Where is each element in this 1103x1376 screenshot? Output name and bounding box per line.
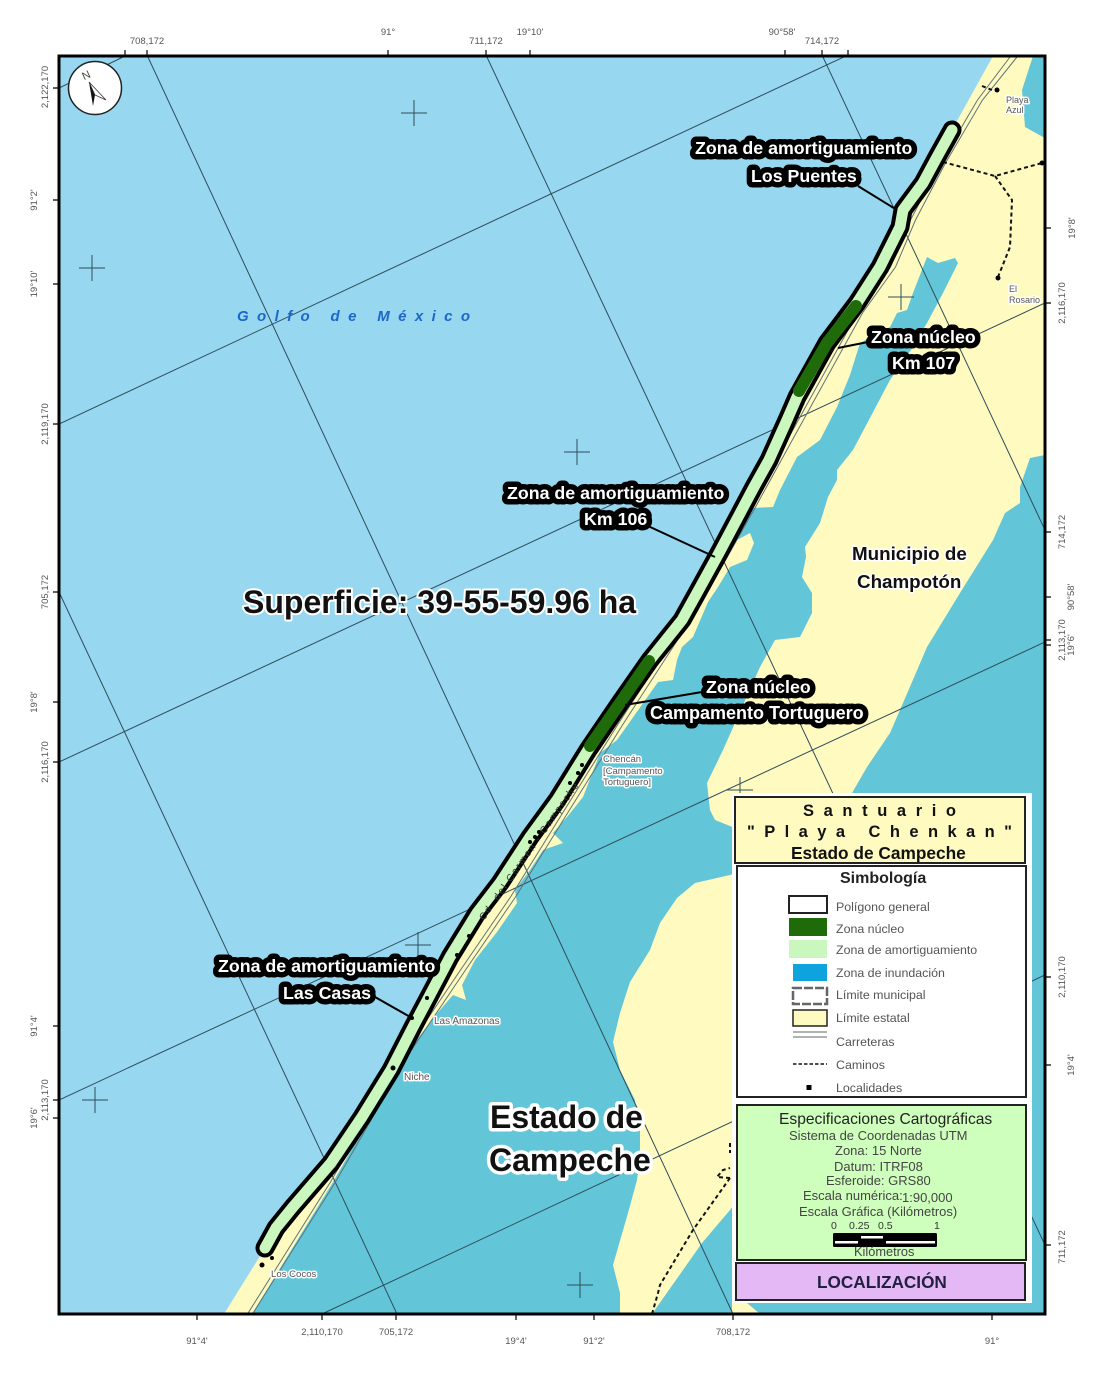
road name along the strip: Cd. del Carmen - Campeche [477,781,581,923]
legend item labels [836,900,977,1095]
locality names: Azul [1006,105,1024,115]
panel: cartographic specifications [737,1105,1026,1260]
locality names: Las Amazonas [434,1016,500,1027]
callout: Las Casas: Las Casas [283,983,371,1003]
panel: cartographic specifications: Escala numérica: [803,1188,903,1203]
callout: Km 106: Km 106 [584,509,647,529]
right coordinate labels: 2,113,170 [1057,619,1068,661]
top coordinate labels: 714,172 [805,36,839,47]
bottom coordinate labels: 19°4' [505,1336,527,1347]
top coordinate labels: 90°58' [769,27,796,38]
leader lines [375,186,897,1018]
scale bar [831,1220,940,1259]
scale bar: 0.5 [878,1220,893,1232]
roads [248,57,1017,1314]
left coordinate labels: 2,122,170 [40,66,51,108]
bottom coordinate labels: 2,110,170 [301,1327,343,1338]
panel: cartographic specifications: Sistema de Coordenadas UTM [789,1128,967,1143]
callout: Campamento Tortuguero: Zona núcleo [706,677,811,697]
panel: location [736,1263,1025,1300]
locality dots [260,88,1044,1268]
scale bar: Kilómetros [854,1244,914,1259]
panel: symbology: Simbología [840,870,926,887]
panel: cartographic specifications: Esferoide: GRS80 [826,1173,931,1188]
panel: cartographic specifications: Escala Gráfica (Kilómetros) [799,1204,957,1219]
left coordinate labels: 705,172 [40,575,51,609]
core zone: Campamento Tortuguero [590,661,649,746]
locality names [271,95,1040,1280]
locality names: Tortuguero] [603,777,651,788]
swatch: general polygon [789,896,827,913]
swatch: roads [793,1032,827,1037]
left coordinate labels: 2,113,170 [40,1079,51,1121]
callout: Km 107 [871,327,976,373]
legend item labels: Límite municipal [836,988,926,1002]
right coordinate labels: 90°58' [1066,583,1077,610]
surface area heading: Superficie: 39-55-59.96 ha [243,584,636,620]
icon: north arrow: N [80,69,93,83]
sanctuary outline: general polygon [265,130,952,1248]
bottom coordinate labels: 91°2' [583,1336,605,1347]
land base [224,56,1045,1314]
locality names: Los Cocos [271,1269,317,1280]
scale bar: 0 [831,1220,837,1232]
swatch: municipal limit [793,988,827,1004]
callout: Los Puentes: Los Puentes [751,166,857,186]
bottom coordinate labels: 91°4' [186,1336,208,1347]
locality names: Chencán [603,754,641,765]
left coordinate labels [29,66,51,1129]
right coordinate labels: 711,172 [1057,1230,1068,1264]
scale bar: 0.25 [849,1220,870,1232]
bottom coordinate labels: 91° [985,1336,999,1347]
callout: Campamento Tortuguero [650,677,864,723]
label: Municipio de Champotón [852,543,967,592]
core zone: Km 107 [799,306,856,391]
legend item labels: Zona núcleo [836,922,904,936]
right coordinate labels [1057,217,1078,1264]
swatch: state limit [793,1010,827,1026]
callout: Las Casas: Zona de amortiguamiento [218,956,435,976]
bottom coordinate labels: 705,172 [379,1327,413,1338]
panel: cartographic specifications: Datum: ITRF08 [834,1159,923,1174]
bottom coordinate labels: 708,172 [716,1327,750,1338]
right coordinate labels: 2,110,170 [1057,956,1068,998]
panel: cartographic specifications: Especificaciones Cartográficas [779,1111,992,1128]
grid crosshairs [79,100,914,1298]
scale bar: 1 [934,1220,940,1232]
label: Municipio de Champotón: Champotón [857,571,961,592]
callout: Las Casas [218,956,435,1003]
panel: title: Estado de Campeche [791,843,966,863]
top coordinate labels [130,27,839,47]
lagoon: main flood zone [252,257,958,1314]
left coordinate labels: 91°2' [29,189,40,211]
panel: cartographic specifications: 1:90,000 [902,1190,953,1205]
callout: Km 106 [507,483,724,529]
panel: title: Santuario [803,802,956,820]
swatch: core zone [789,918,827,936]
right coordinate labels: 2,116,170 [1057,282,1068,324]
panel: cartographic specifications: Zona: 15 Norte [835,1143,922,1158]
locality names: Niche [404,1072,430,1083]
legend item labels: Zona de amortiguamiento [836,943,977,957]
locality names: El [1009,284,1017,294]
legend item labels: Polígono general [836,900,930,914]
right coordinate labels: 714,172 [1057,515,1068,549]
lagoon: eastern flood zone [652,455,1045,1314]
callout: Campamento Tortuguero: Campamento Tortuguero [650,703,864,723]
label: Municipio de Champotón: Municipio de [852,543,967,564]
left coordinate labels: 19°6' [29,1107,40,1129]
top coordinate labels: 91° [381,27,395,38]
label: Estado de Campeche: Campeche [489,1142,651,1178]
locality names: [Campamento [603,766,663,777]
legend item labels: Zona de inundación [836,966,945,980]
left coordinate labels: 91°4' [29,1015,40,1037]
locality names: Playa [1006,95,1029,105]
callout: Los Puentes: Zona de amortiguamiento [695,138,912,158]
legend panel [732,793,1032,1303]
icon: north arrow [68,62,122,114]
callout: Km 107: Km 107 [892,353,955,373]
panel: title: "Playa Chenkan" [747,823,1012,841]
legend item labels: Caminos [836,1058,885,1072]
label: Golfo de México: Golfo de México [237,308,470,325]
left coordinate labels: 19°10' [29,270,40,297]
left coordinate labels: 2,119,170 [40,403,51,445]
buffer zone strip [265,130,952,1248]
swatch: buffer zone [789,940,827,958]
top coordinate labels: 19°10' [517,27,544,38]
swatch: tracks [793,1063,827,1065]
right coordinate labels: 19°6' [1066,634,1077,656]
right coordinate labels: 19°4' [1066,1054,1077,1076]
panel: title [735,797,1025,863]
legend item labels: Límite estatal [836,1011,910,1025]
right coordinate labels: 19°8' [1067,217,1078,239]
top coordinate labels: 708,172 [130,36,164,47]
label: Estado de Campeche: Estado de [490,1099,643,1135]
locality names: Rosario [1009,295,1040,305]
left coordinate labels: 19°8' [29,691,40,713]
legend item labels: Carreteras [836,1035,895,1049]
callout: Km 107: Zona núcleo [871,327,976,347]
left coordinate labels: 2,116,170 [40,741,51,783]
panel: location: LOCALIZACIÓN [817,1272,947,1292]
swatch: flood zone [793,964,827,981]
callout: Km 106: Zona de amortiguamiento [507,483,724,503]
bottom coordinate labels [186,1327,999,1347]
swatch: localities [806,1085,812,1090]
legend item labels: Localidades [836,1081,902,1095]
label: Estado de Campeche [489,1099,651,1178]
panel: symbology [737,866,1026,1097]
dirt tracks [652,86,1042,1314]
top coordinate labels: 711,172 [469,36,503,47]
lagoon: north-east corner [1022,56,1045,137]
callout: Los Puentes [695,138,912,186]
